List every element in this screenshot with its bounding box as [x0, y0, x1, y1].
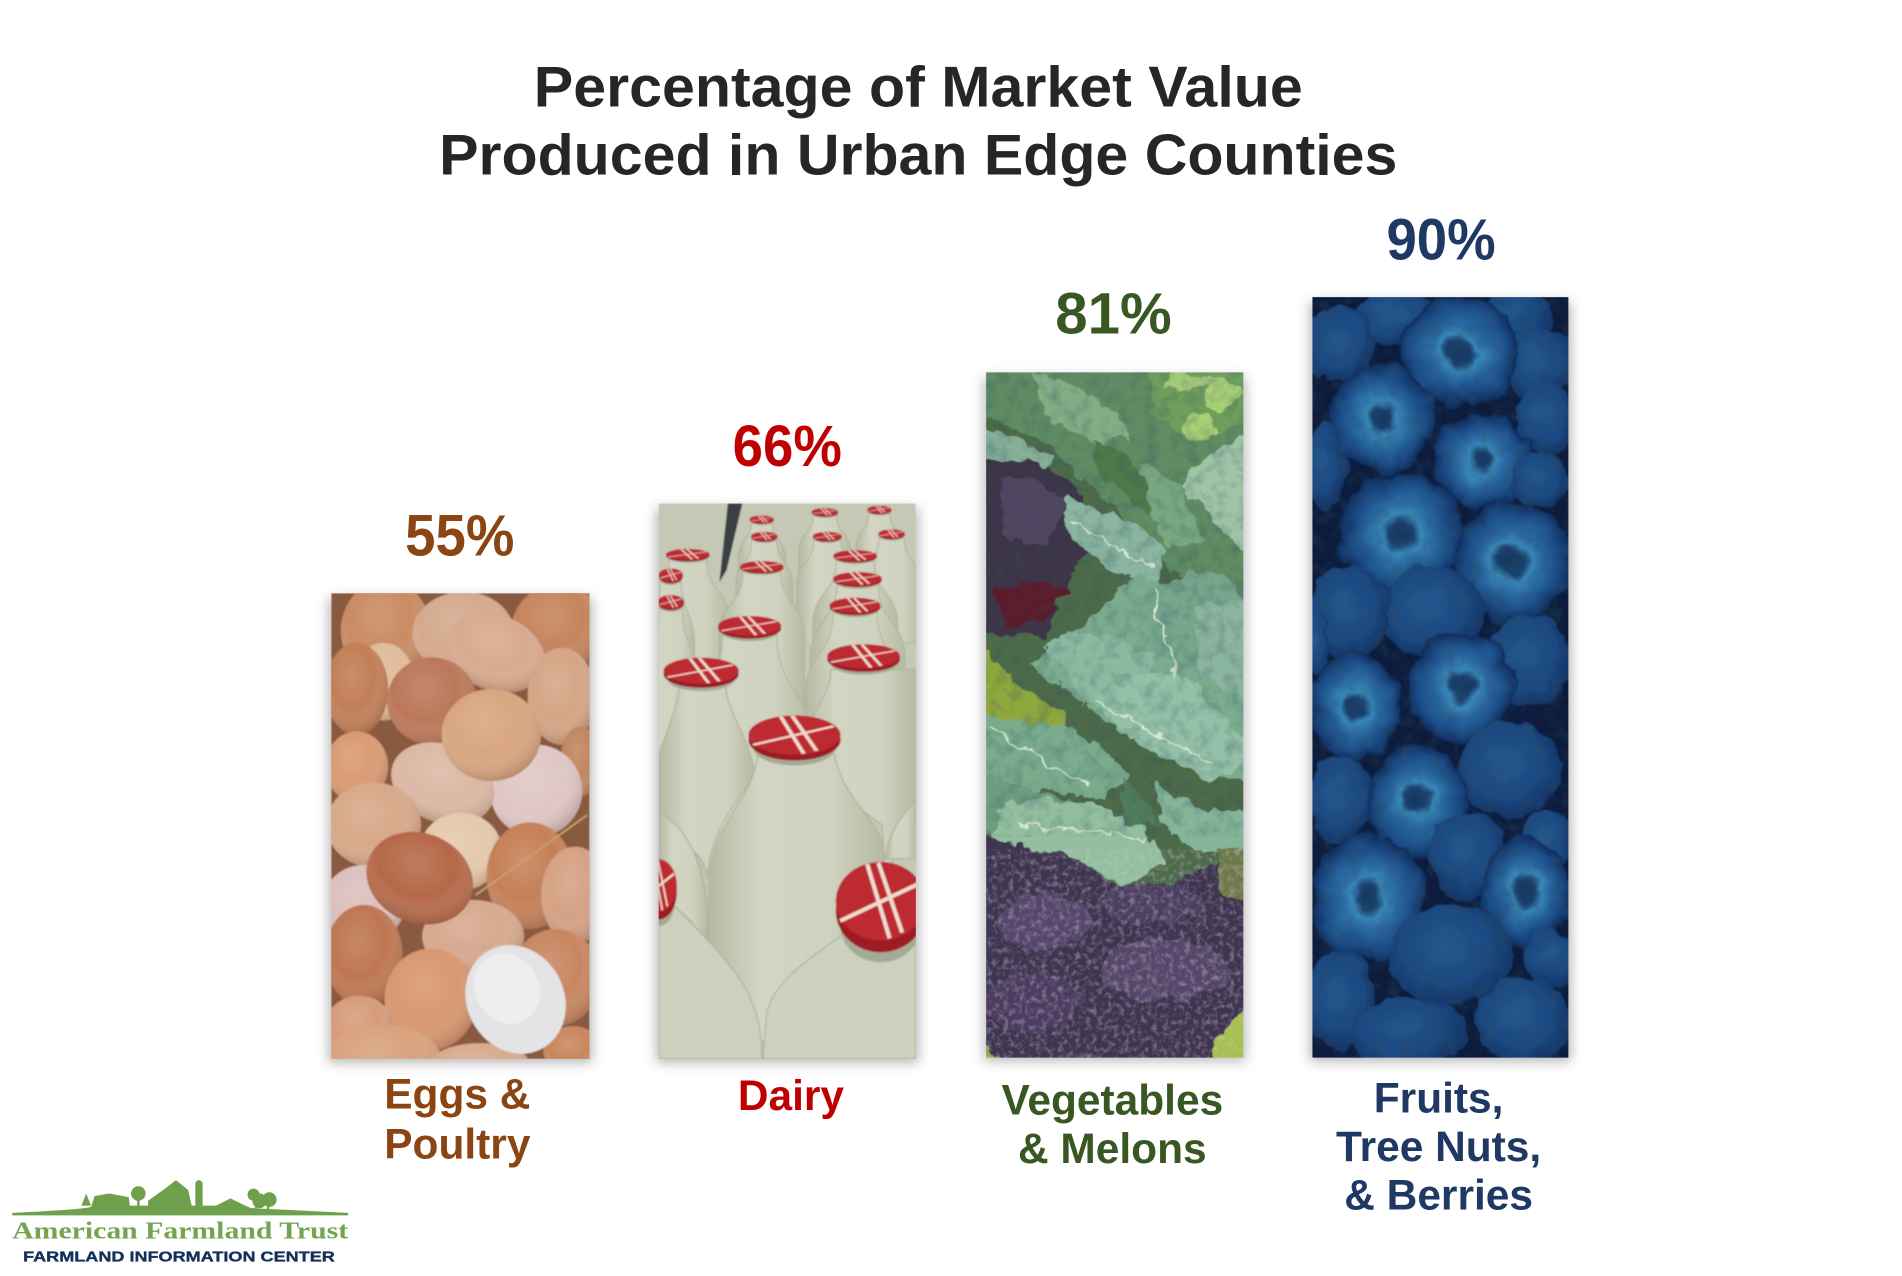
bar shadow: [984, 377, 1246, 1061]
label: Fruits, Tree Nuts, & Berries: & Berries: [1344, 1171, 1533, 1218]
bar shadow: [329, 598, 592, 1063]
label: Vegetables & Melons: Vegetables: [1001, 1077, 1223, 1124]
title: [439, 56, 1397, 188]
label: Vegetables & Melons: [1001, 1077, 1223, 1172]
value: 66%: 66%: [733, 414, 842, 479]
label: Fruits, Tree Nuts, & Berries: [1336, 1074, 1541, 1218]
logo wordmark: American Farmland Trust: [12, 1217, 348, 1244]
photo bar: leafy vegetables: [986, 372, 1244, 1058]
label: Vegetables & Melons: & Melons: [1018, 1125, 1207, 1172]
label: Fruits, Tree Nuts, & Berries: Fruits,: [1374, 1074, 1503, 1121]
photo bar: milk bottles: [640, 503, 926, 1059]
column: vegetables and melons: [974, 282, 1255, 1172]
title: Produced in Urban Edge Counties: [439, 124, 1397, 188]
value: 55%: 55%: [405, 504, 514, 569]
photo bar: blueberries: [1312, 297, 1568, 1058]
column: dairy: [640, 414, 926, 1119]
title: Percentage of Market Value: [534, 56, 1303, 120]
logo subtitle: FARMLAND INFORMATION CENTER: [23, 1248, 335, 1265]
label: Eggs & Poultry: [384, 1071, 531, 1167]
value: 90%: 90%: [1386, 208, 1496, 273]
photo bar: eggs: [331, 593, 590, 1059]
logo: American Farmland Trust: [12, 1180, 348, 1265]
column: fruits, tree nuts and berries: [1300, 208, 1581, 1218]
column: eggs and poultry: [323, 504, 609, 1167]
bar shadow: [656, 508, 918, 1063]
label: Eggs & Poultry: Poultry: [384, 1120, 531, 1167]
label: Eggs & Poultry: Eggs &: [384, 1071, 530, 1118]
icon: farm silhouette: [12, 1180, 348, 1215]
label: Dairy: Dairy: [738, 1072, 844, 1119]
bar shadow: [1310, 302, 1571, 1061]
label: Fruits, Tree Nuts, & Berries: Tree Nuts,: [1336, 1123, 1541, 1170]
value: 81%: 81%: [1055, 282, 1172, 347]
